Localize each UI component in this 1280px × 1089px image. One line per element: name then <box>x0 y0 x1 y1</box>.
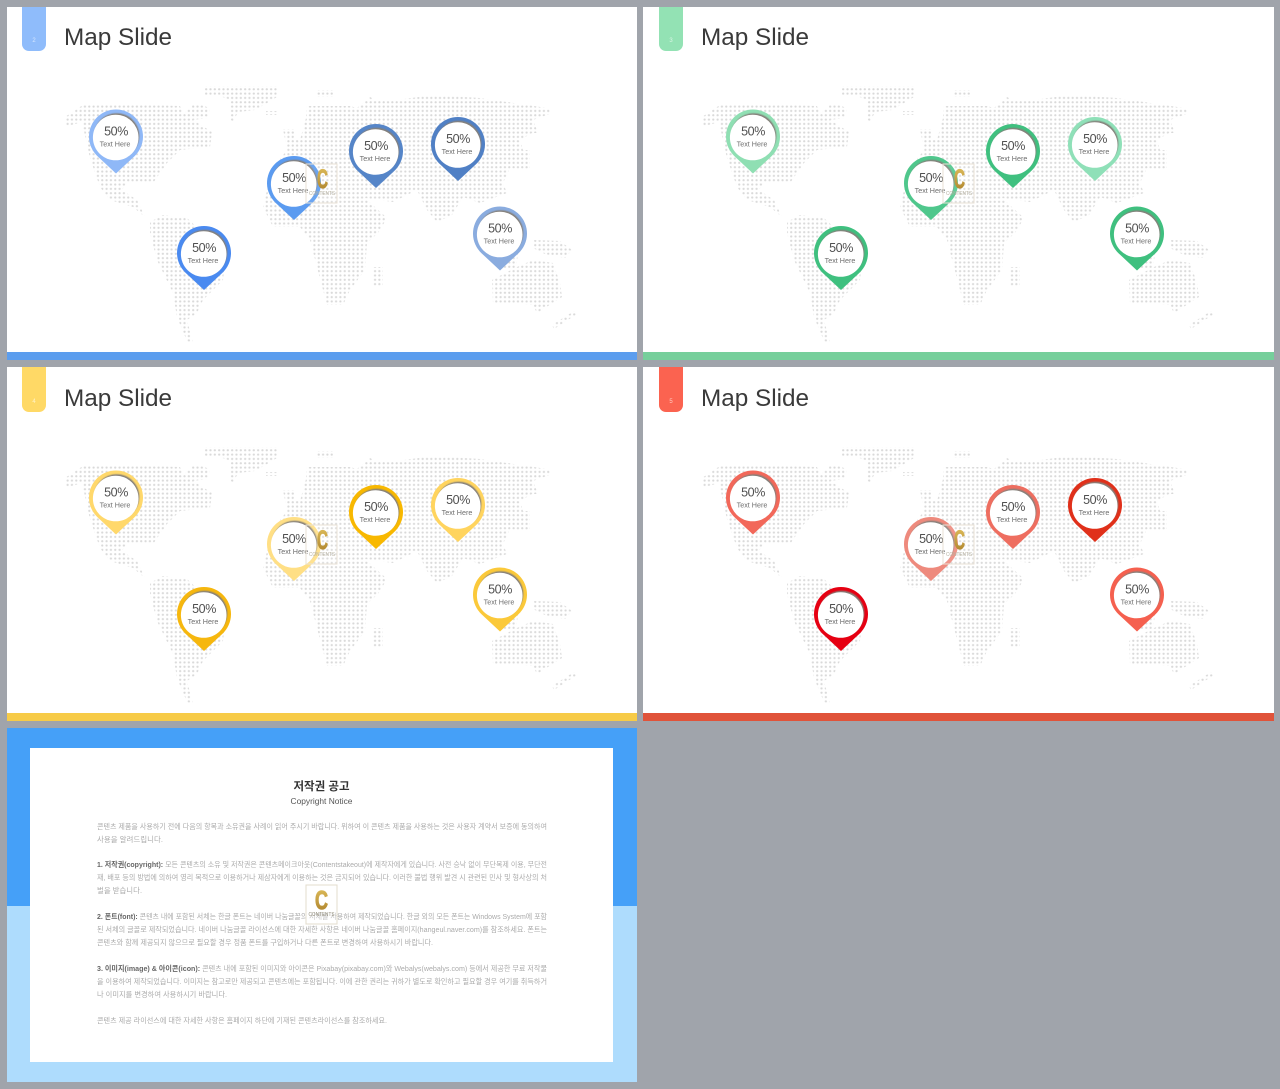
notice intro text <box>97 821 547 844</box>
dotted world map <box>697 441 1222 711</box>
notice intro text: 콘텐츠 제품을 사용하기 전에 다음의 항목과 소유권을 사례이 읽어 주시기 바랍니다. 위하여 이 콘텐츠 제품을 사용하는 것은 사용자 계약서 보증에 동의하여 <box>97 821 547 831</box>
notice heading: 저작권 공고 <box>293 779 350 793</box>
map pin 2 <box>904 517 958 581</box>
map pin 4: 50% <box>1001 139 1025 153</box>
map pin 1 <box>89 471 143 534</box>
map pin 1: 50% <box>741 486 765 500</box>
map pin 5: Text Here <box>1079 508 1109 517</box>
map pin 3: Text Here <box>825 256 855 265</box>
map pin 3: 50% <box>829 241 853 255</box>
map pin 5: Text Here <box>442 508 472 517</box>
panel: green map slide <box>643 7 1274 360</box>
page tab <box>659 7 683 51</box>
map pin 4 <box>986 485 1040 549</box>
dotted world map <box>697 80 1222 350</box>
map pin 2: Text Here <box>278 186 308 195</box>
map pin 5: 50% <box>1083 493 1107 507</box>
page tab: 3 <box>669 38 673 44</box>
map pin 6: 50% <box>488 222 512 236</box>
watermark <box>306 885 337 924</box>
map pin 6: 50% <box>1125 222 1149 236</box>
page tab <box>659 367 683 412</box>
notice subheading: Copyright Notice <box>291 796 353 806</box>
map pin 6: 50% <box>488 582 512 596</box>
map pin 1: Text Here <box>737 140 767 148</box>
map pin 2: 50% <box>282 532 306 546</box>
section 2: font: 된 서체의 글꼴로 제작되었습니다. 네이버 나눔글꼴 라이선스에 대한 자세한 사항은 네이버 나눔글꼴 홈페이지(hangeul.naver.com)를 참조하세요. 폰트는 <box>97 924 547 934</box>
map pin 3 <box>177 226 231 290</box>
map pin 5 <box>1068 117 1122 181</box>
map pin 4 <box>349 485 403 549</box>
map pin 1 <box>89 110 143 174</box>
map pin 3 <box>814 587 868 651</box>
map pin 3: 50% <box>829 602 853 616</box>
section 2: font <box>97 911 547 947</box>
map pin 5: 50% <box>1083 132 1107 146</box>
page tab <box>22 367 46 412</box>
section 3: image and icon: 3. 이미지(image) & 아이콘(icon): 콘텐츠 내에 포함된 이미지와 아이콘은 Pixabay(pixabay.com)와 Webalys(webalys.com) 등에서 제공한 무료 저작물 <box>97 963 547 973</box>
map pin 4: Text Here <box>360 515 390 524</box>
map pin 1: Text Here <box>100 500 130 510</box>
map pin 1 <box>726 110 780 174</box>
section 1: copyright <box>97 859 547 895</box>
map pin 4: Text Here <box>997 515 1027 524</box>
map pin 3 <box>177 587 231 651</box>
watermark <box>943 164 974 203</box>
panel: yellow map slide <box>7 367 637 721</box>
section 1: copyright: 벌을 받습니다. <box>97 885 142 895</box>
dotted world map <box>60 441 585 711</box>
map pin 2: Text Here <box>278 547 308 556</box>
map pin 6: Text Here <box>1121 236 1151 246</box>
map pin 5 <box>1068 478 1122 542</box>
page tab: 5 <box>669 399 673 405</box>
section 1: copyright: 1. 저작권(copyright): 모든 콘텐츠의 소유 및 저작권은 콘텐츠메이크아웃(Contentstakeout)에 제작자에게 있습니다. 사전 승낙 없이 무단복제 이용, 무단전 <box>97 859 547 869</box>
map pin 4: 50% <box>1001 500 1025 514</box>
map pin 2 <box>904 156 958 220</box>
map pin 6: Text Here <box>484 236 514 246</box>
map pin 2 <box>267 517 321 581</box>
map pin 4: 50% <box>364 500 388 514</box>
map pin 3: 50% <box>192 602 216 616</box>
section 3: image and icon: 을 이용하여 제작되었습니다. 이미지는 참고로만 제공되고 콘텐츠에는 포함됩니다. 이에 관한 권리는 귀하가 별도로 확인하고 필요할 경우 여기를 취득하거 <box>97 976 547 986</box>
map pin 6: Text Here <box>1121 598 1151 606</box>
heading: Map Slide <box>701 385 809 412</box>
map pin 1: 50% <box>104 486 128 500</box>
map pin 6 <box>1110 207 1164 270</box>
map pin 3: Text Here <box>825 617 855 626</box>
page tab <box>22 7 46 51</box>
panel: blue map slide <box>7 7 637 360</box>
map pin 1: 50% <box>741 124 765 138</box>
watermark <box>306 525 337 564</box>
dotted world map <box>60 80 585 350</box>
map pin 5: Text Here <box>1079 147 1109 156</box>
map pin 3: Text Here <box>188 256 218 265</box>
map pin 2: 50% <box>919 171 943 185</box>
map pin 2 <box>267 156 321 220</box>
section 3: image and icon: 나 이미지를 변경하여 사용하시기 바랍니다. <box>97 989 227 999</box>
section 2: font: 2. 폰트(font): 콘텐츠 내에 포함된 서체는 한글 폰트는 네이버 나눔글꼴의 서체를 사용하여 제작되었습니다. 한글 외의 모든 폰트는 Windows System에 포함 <box>97 911 547 921</box>
heading: Map Slide <box>64 385 172 412</box>
map pin 6 <box>1110 568 1164 632</box>
heading: Map Slide <box>701 24 809 51</box>
map pin 1: Text Here <box>737 500 767 510</box>
map pin 4 <box>349 124 403 188</box>
watermark <box>306 164 337 203</box>
map pin 3: 50% <box>192 241 216 255</box>
map pin 6 <box>473 568 527 632</box>
map pin 4: Text Here <box>997 154 1027 163</box>
watermark: C <box>315 885 328 915</box>
watermark <box>943 525 974 564</box>
map pin 3 <box>814 226 868 290</box>
map pin 6: Text Here <box>484 598 514 606</box>
map pin 5: Text Here <box>442 147 472 156</box>
section 1: copyright: 재, 배포 등의 방법에 의하여 영리 목적으로 이용하거나 제삼자에게 이용하는 것은 금지되어 있습니다. 이러한 불법 행위 발견 시 관련된 민사 및 형사상의 처 <box>97 872 547 882</box>
panel: copyright notice slide <box>7 728 637 1082</box>
map pin 2: Text Here <box>915 547 945 556</box>
map pin 4: Text Here <box>360 154 390 163</box>
map pin 2: 50% <box>282 171 306 185</box>
closing text: 콘텐츠 제공 라이선스에 대한 자세한 사항은 홈페이지 하단에 기재된 콘텐츠라이선스를 참조하세요. <box>97 1015 387 1025</box>
map pin 5 <box>431 478 485 542</box>
map pin 2: 50% <box>919 532 943 546</box>
map pin 2: Text Here <box>915 186 945 195</box>
map pin 5 <box>431 117 485 181</box>
map pin 4: 50% <box>364 139 388 153</box>
panel: red map slide <box>643 367 1274 721</box>
map pin 1: Text Here <box>100 140 130 148</box>
map pin 1: 50% <box>104 124 128 138</box>
map pin 6 <box>473 207 527 270</box>
map pin 5: 50% <box>446 493 470 507</box>
section 2: font: 콘텐츠와 함께 제공되지 않으므로 필요할 경우 정품 폰트를 구입하거나 다른 폰트로 변경하여 사용하시기 바랍니다. <box>97 937 433 947</box>
map pin 3: Text Here <box>188 617 218 626</box>
notice intro text: 사용을 알려드립니다. <box>97 834 163 844</box>
map pin 1 <box>726 471 780 534</box>
map pin 6: 50% <box>1125 582 1149 596</box>
page tab: 4 <box>32 399 36 405</box>
heading: Map Slide <box>64 24 172 51</box>
watermark: CONTENTS <box>308 912 335 918</box>
map pin 5: 50% <box>446 132 470 146</box>
map pin 4 <box>986 124 1040 188</box>
page tab: 2 <box>32 38 36 44</box>
section 3: image and icon <box>97 963 547 999</box>
